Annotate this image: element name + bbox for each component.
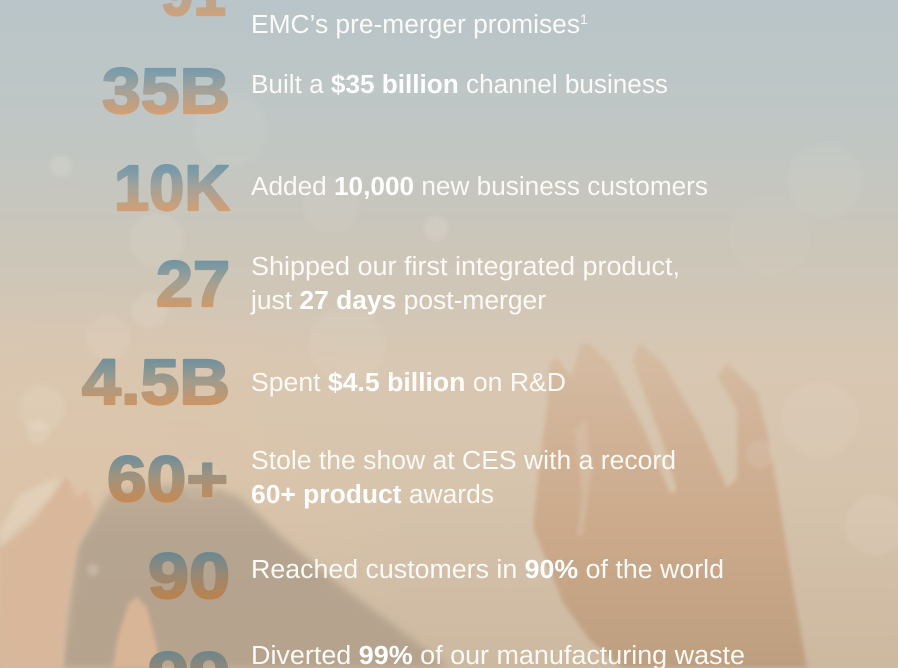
stat row: R&D spend — [82, 346, 566, 418]
stat row: 35 billion channel — [102, 55, 668, 127]
big number 35B: 35B — [102, 55, 230, 127]
big number 60+: 60+ — [107, 443, 228, 515]
left hand pale glow — [0, 478, 60, 545]
description — [250, 253, 680, 315]
bokeh circles — [18, 92, 898, 576]
footnote marker: 1 — [580, 11, 588, 27]
right hand — [533, 343, 807, 668]
right hand finger gaps — [574, 420, 592, 535]
stat row: pre-merger promises — [161, 0, 588, 39]
description: Added 10,000 new business customers — [251, 173, 708, 201]
stat row: CES awards — [107, 443, 676, 515]
description — [251, 447, 676, 509]
description: Reached customers in 90% of the world — [251, 556, 724, 584]
stat row: 10,000 customers — [114, 152, 708, 224]
stat row: waste diverted — [148, 639, 745, 668]
left hand — [0, 477, 95, 668]
stat row: 27 days — [156, 248, 680, 320]
description: Spent $4.5 billion on R&D — [251, 369, 566, 397]
description: EMC’s pre-merger promises — [251, 11, 580, 39]
description: Shipped our first integrated product, — [251, 253, 680, 281]
big number 27: 27 — [156, 248, 230, 320]
big number 4.5B: 4.5B — [82, 346, 230, 418]
big number 90: 90 — [148, 540, 230, 612]
description: just 27 days post-merger — [250, 287, 547, 315]
stat row: world reach — [148, 540, 724, 612]
description: 60+ product awards — [251, 481, 494, 509]
description: Stole the show at CES with a record — [251, 447, 676, 475]
distant hill silhouette — [62, 483, 450, 668]
big number 10K: 10K — [114, 152, 230, 224]
description: Built a $35 billion channel business — [251, 71, 668, 99]
foreground finger — [113, 597, 161, 668]
